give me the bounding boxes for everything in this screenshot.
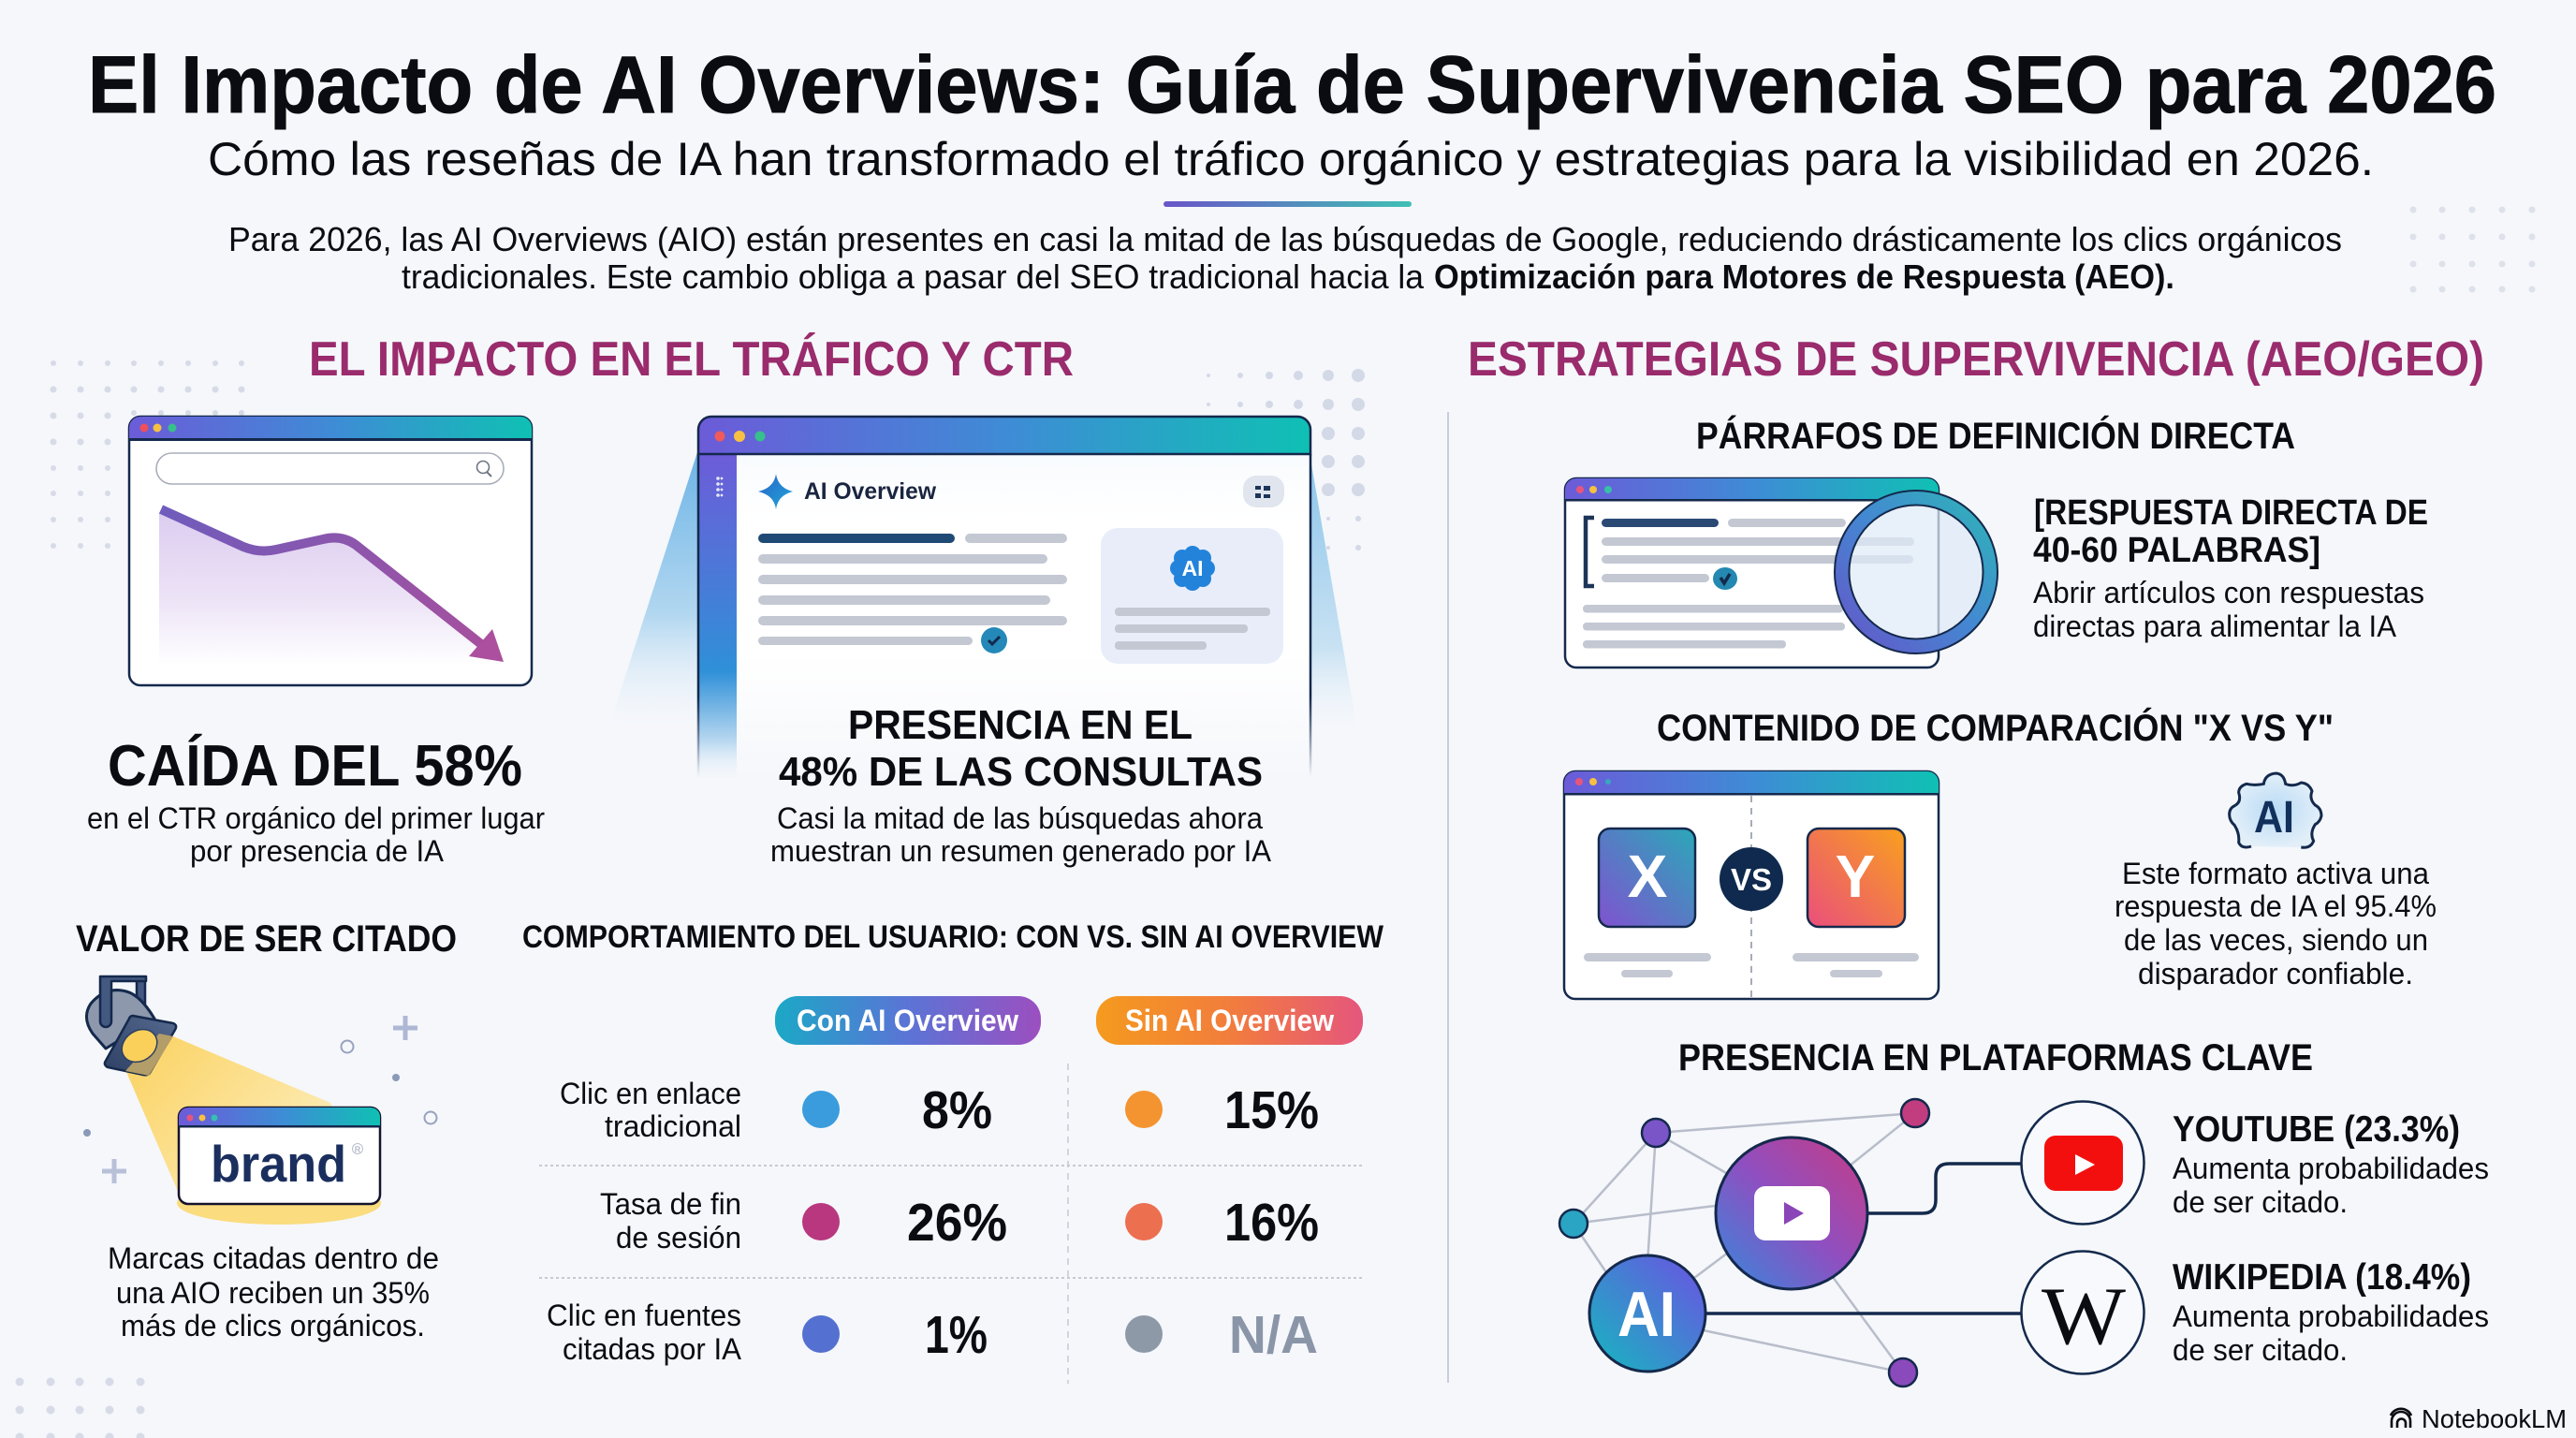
connector: video to YouTube (1868, 1164, 2023, 1213)
text: comparison format: disparador confiable. (2138, 957, 2413, 990)
stat: AI Overview presence: muestran un resumen generado por IA (770, 834, 1272, 868)
VS badge: VS (1731, 862, 1772, 897)
title: El Impacto de AI Overviews: Guía de Supervivencia SEO para 2026 (88, 40, 2496, 130)
text: YouTube: YOUTUBE (23.3%) (2173, 1109, 2460, 1150)
brand window: R (355, 1145, 361, 1154)
brand window: brand (211, 1135, 346, 1193)
heading: key platforms: PRESENCIA EN PLATAFORMAS CLAVE (1678, 1037, 2313, 1078)
text: Wikipedia (2173, 1257, 2489, 1367)
text: comparison format (2115, 857, 2437, 990)
text: YouTube: Aumenta probabilidades (2173, 1152, 2489, 1185)
search bar (156, 453, 504, 484)
brand window (179, 1108, 380, 1204)
Y card (1808, 829, 1905, 927)
icon: AI gear (2230, 773, 2321, 847)
text: comparison format: Este formato activa una (2122, 857, 2429, 890)
AI Overview label: AI Overview (804, 478, 937, 505)
section heading: strategies: ESTRATEGIAS DE SUPERVIVENCIA (AEO/GEO) (1468, 332, 2484, 387)
light beams (609, 449, 1357, 730)
panel: CTR drop browser (129, 417, 532, 685)
heading: X vs Y: CONTENIDO DE COMPARACIÓN "X VS Y" (1657, 706, 2334, 749)
text: comparison format: de las veces, siendo un (2124, 923, 2428, 957)
overview menu button (1243, 476, 1284, 507)
icon: check badge (1713, 567, 1737, 590)
stat: AI Overview presence (770, 702, 1272, 868)
light pool (177, 1181, 381, 1225)
row: session end rate: 16% (1224, 1193, 1319, 1253)
pill: with AI Overview (775, 996, 1041, 1045)
text: YouTube (2173, 1109, 2489, 1219)
AI source card (1101, 528, 1283, 664)
title accent rule (1164, 201, 1412, 207)
text: direct answer: directas para alimentar la IA (2033, 609, 2397, 643)
row: traditional link clicks (560, 1077, 1319, 1143)
citation value text: más de clics orgánicos. (121, 1309, 425, 1343)
spotlight lamp (86, 976, 176, 1076)
stat: AI Overview presence: PRESENCIA EN EL (848, 702, 1193, 748)
heading: citation value: VALOR DE SER CITADO (76, 918, 457, 960)
citation value text: Marcas citadas dentro de (108, 1241, 439, 1275)
row: clicks on AI cited sources: N/A (1229, 1305, 1318, 1365)
text: Wikipedia: Aumenta probabilidades (2173, 1299, 2489, 1333)
text: direct answer: 40-60 PALABRAS] (2033, 531, 2320, 570)
X card: X (1628, 843, 1668, 910)
illustration: document with magnifier (1565, 478, 1998, 668)
comparison table (539, 996, 1363, 1384)
pill: with AI Overview: Con AI Overview (797, 1004, 1018, 1037)
intro paragraph: Para 2026, las AI Overviews (AIO) están presentes en casi la mitad de las búsquedas de Google, reduciendo drásticamente los clics orgánicos (228, 220, 2342, 258)
AI source card: AI (1181, 556, 1204, 580)
citation value text (108, 1241, 439, 1343)
dot pattern: upper left (51, 360, 245, 549)
Y card: Y (1836, 843, 1875, 910)
network diagram (1559, 1099, 2144, 1387)
row: clicks on AI cited sources: Clic en fuentes (547, 1299, 741, 1332)
row: session end rate: de sesión (616, 1221, 741, 1255)
column divider (1447, 412, 1449, 1383)
VS badge (1720, 847, 1783, 911)
small network nodes (1559, 1099, 1929, 1387)
dot pattern: centre top (1207, 369, 1365, 550)
falling trend arrow (161, 509, 504, 662)
intro paragraph: Optimización para Motores de Respuesta (AEO). (1434, 257, 2174, 296)
row: clicks on AI cited sources: 1% (925, 1305, 988, 1365)
subtitle: Cómo las reseñas de IA han transformado el tráfico orgánico y estrategias para la visibilidad en 2026. (208, 133, 2374, 185)
light beam (126, 1036, 370, 1204)
row: clicks on AI cited sources: citadas por IA (563, 1332, 742, 1366)
heading: user behaviour: COMPORTAMIENTO DEL USUARIO: CON VS. SIN AI OVERVIEW (522, 919, 1384, 955)
intro paragraph: tradicionales. Este cambio obliga a pasar del SEO tradicional hacia la (402, 257, 1425, 296)
text: comparison format: respuesta de IA el 95.4% (2115, 889, 2437, 923)
X card (1599, 829, 1695, 927)
row: traditional link clicks: 15% (1224, 1080, 1319, 1140)
row: session end rate: 26% (907, 1193, 1007, 1253)
stat: CTR drop (87, 734, 545, 868)
stat: AI Overview presence: 48% DE LAS CONSULTAS (779, 749, 1263, 795)
text: direct answer (2033, 493, 2428, 643)
decorative sparkles (83, 1016, 436, 1183)
AI node: AI (1617, 1279, 1676, 1350)
skeleton text lines (758, 534, 1067, 645)
dot pattern: bottom left (15, 1378, 144, 1438)
icon: magnifier (1835, 491, 1998, 653)
icon: AI gear: AI (2254, 793, 2294, 843)
icon: Wikipedia: W (2042, 1271, 2126, 1362)
dot pattern: upper right (2409, 206, 2535, 292)
icon: sparkle (758, 474, 793, 509)
row: clicks on AI cited sources (547, 1299, 1318, 1366)
stat: CTR drop: en el CTR orgánico del primer lugar (87, 801, 545, 835)
text: direct answer: [RESPUESTA DIRECTA DE (2034, 493, 2428, 533)
text: Wikipedia: de ser citado. (2173, 1333, 2348, 1367)
stat: AI Overview presence: Casi la mitad de las búsquedas ahora (777, 801, 1263, 835)
citation value text: una AIO reciben un 35% (116, 1276, 430, 1310)
illustration: spotlight on brand (83, 976, 436, 1225)
area under the trend (159, 513, 491, 666)
video node (1716, 1137, 1867, 1289)
text: direct answer: Abrir artículos con respuestas (2033, 576, 2424, 609)
icon: check badge (981, 627, 1007, 653)
row: session end rate: Tasa de fin (600, 1187, 741, 1221)
icon: YouTube (2022, 1101, 2144, 1225)
text: Wikipedia: WIKIPEDIA (18.4%) (2173, 1257, 2471, 1298)
illustration: comparison window (1564, 771, 1939, 999)
text: YouTube: de ser citado. (2173, 1185, 2348, 1219)
section heading: impact: EL IMPACTO EN EL TRÁFICO Y CTR (309, 332, 1074, 387)
row: traditional link clicks: tradicional (605, 1109, 741, 1143)
row: session end rate (600, 1187, 1319, 1255)
pill: without AI Overview: Sin AI Overview (1125, 1004, 1334, 1037)
intro paragraph (228, 220, 2342, 296)
row: traditional link clicks: Clic en enlace (560, 1077, 741, 1110)
heading: direct definition paragraphs: PÁRRAFOS DE DEFINICIÓN DIRECTA (1696, 414, 2295, 457)
stat: CTR drop: por presencia de IA (190, 834, 445, 868)
stat: CTR drop: CAÍDA DEL 58% (108, 734, 522, 799)
connector: AI to Wikipedia (1704, 1312, 2023, 1315)
row: traditional link clicks: 8% (922, 1080, 992, 1140)
pill: without AI Overview (1096, 996, 1363, 1045)
icon: Wikipedia (2022, 1251, 2144, 1374)
panel: AI Overview browser (609, 417, 1357, 777)
AI node (1589, 1255, 1705, 1372)
NotebookLM logo: NotebookLM (2422, 1404, 2567, 1433)
